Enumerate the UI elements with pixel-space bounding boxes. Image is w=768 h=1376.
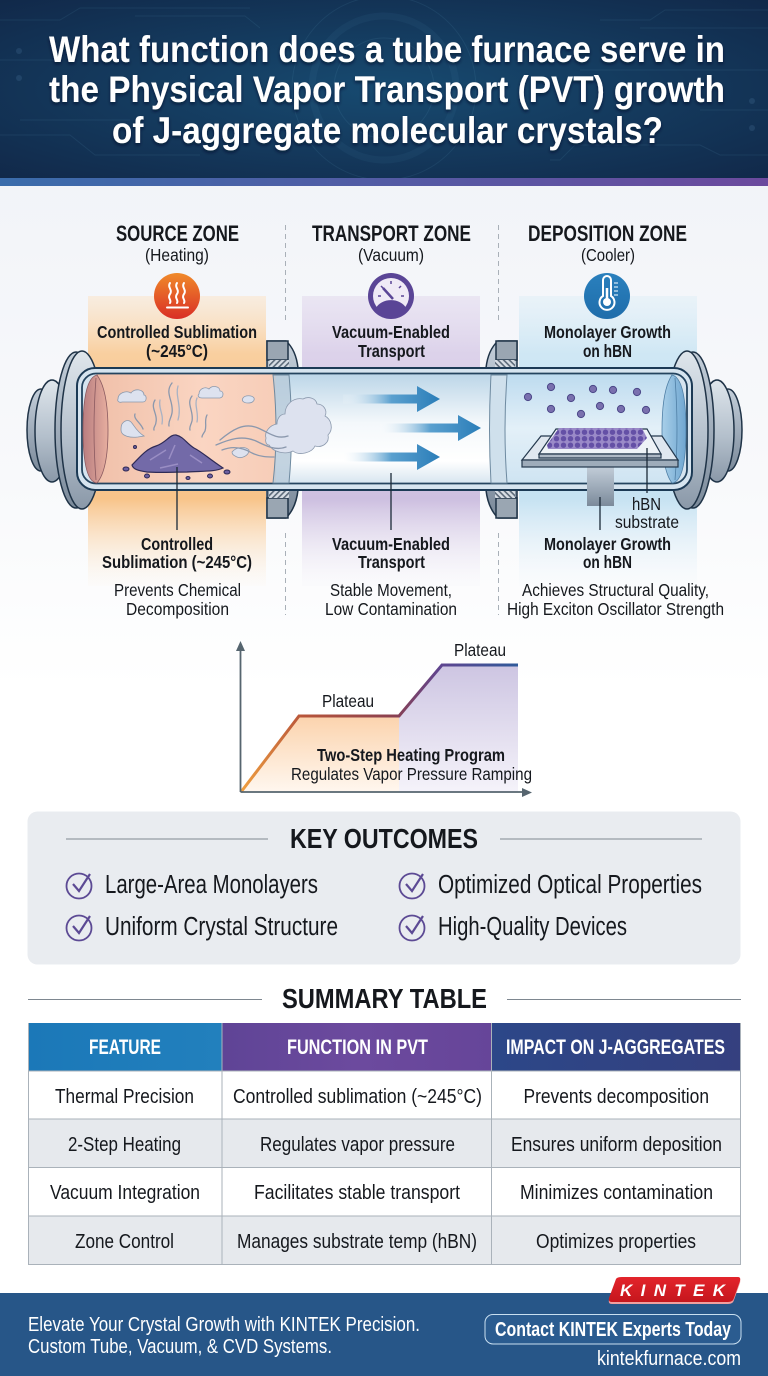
label: vacuum-enabled transport top: Transport xyxy=(358,341,425,361)
outcome: high-quality devices: High-Quality Devices xyxy=(438,913,627,941)
icon: thermometer xyxy=(584,273,630,319)
text block: source zone lower: Sublimation (~245°C) xyxy=(102,552,252,572)
chart: two-step heating program: Plateau xyxy=(454,640,506,660)
text block: transport zone lower: Transport xyxy=(358,552,425,572)
table header: FUNCTION IN PVT xyxy=(287,1036,428,1059)
icon: heat xyxy=(154,273,200,319)
transport arrows xyxy=(343,386,481,470)
table row: zone control: Optimizes properties xyxy=(536,1231,696,1253)
icon: vacuum gauge xyxy=(368,273,414,319)
text block: transport zone lower xyxy=(325,534,457,619)
header banner xyxy=(0,0,768,180)
heading: transport zone: (Vacuum) xyxy=(358,245,424,265)
outcome: large-area monolayers xyxy=(66,871,318,899)
outcome: large-area monolayers: Large-Area Monolayers xyxy=(105,871,318,899)
label: controlled sublimation top: (~245°C) xyxy=(146,341,208,361)
text block: source zone lower: Controlled xyxy=(141,534,213,554)
table row: thermal precision: Prevents decomposition xyxy=(524,1086,709,1108)
left end flange xyxy=(27,351,103,509)
leader lines xyxy=(177,448,647,530)
heading: transport zone xyxy=(312,221,471,265)
chart: two-step heating program: Two-Step Heating Program xyxy=(317,745,505,765)
label: hBN substrate: substrate xyxy=(615,512,679,532)
website: kintekfurnace.com xyxy=(597,1348,741,1370)
heading: deposition zone: DEPOSITION ZONE xyxy=(528,221,687,246)
table header xyxy=(28,1023,741,1071)
label: hBN substrate: hBN xyxy=(632,494,661,514)
outcome: uniform crystal structure: Uniform Crystal Structure xyxy=(105,913,338,941)
pedestal xyxy=(587,466,614,506)
outcome: optimized optical properties: Optimized Optical Properties xyxy=(438,871,702,899)
heading: source zone xyxy=(116,221,239,265)
panel: source zone band xyxy=(88,296,266,586)
label: hBN substrate xyxy=(615,494,679,532)
label: monolayer growth top: Monolayer Growth xyxy=(544,322,671,342)
right collar xyxy=(490,375,507,483)
text block: source zone lower: Prevents Chemical xyxy=(114,580,241,600)
powder pile xyxy=(123,435,230,480)
panel: deposition zone band xyxy=(519,296,697,586)
text block: deposition zone lower: Achieves Structural Quality, xyxy=(522,580,709,600)
table header: FEATURE xyxy=(89,1036,161,1059)
KINTEK logo xyxy=(609,1277,740,1304)
panel: key outcomes xyxy=(28,812,740,964)
table row: zone control: Zone Control xyxy=(75,1231,174,1253)
text block: deposition zone lower: High Exciton Oscillator Strength xyxy=(507,599,724,619)
table row: vacuum integration xyxy=(50,1182,713,1204)
heading: transport zone: TRANSPORT ZONE xyxy=(312,221,471,246)
KINTEK logo: KINTEK xyxy=(620,1281,727,1300)
table row: zone control: Manages substrate temp (hBN) xyxy=(237,1231,477,1253)
chart: two-step heating program: Regulates Vapor Pressure Ramping xyxy=(291,764,532,784)
table row: thermal precision: Controlled sublimation (~245°C) xyxy=(233,1086,482,1108)
deposition interior xyxy=(492,374,683,483)
wisps and clouds xyxy=(118,387,331,458)
title xyxy=(49,29,725,151)
chart: two-step heating program: Plateau xyxy=(322,691,374,711)
table row: zone control xyxy=(75,1231,696,1253)
heading: summary table: SUMMARY TABLE xyxy=(282,983,487,1014)
label: controlled sublimation top: Controlled Sublimation xyxy=(97,322,257,342)
heading: key outcomes: KEY OUTCOMES xyxy=(290,823,478,854)
text block: transport zone lower: Low Contamination xyxy=(325,599,457,619)
text block: deposition zone lower: on hBN xyxy=(583,552,632,572)
label: monolayer growth top: on hBN xyxy=(583,341,632,361)
glass tube body xyxy=(77,368,692,490)
table row: thermal precision xyxy=(55,1086,709,1108)
panel: transport zone band xyxy=(302,296,480,586)
middle flange left xyxy=(267,341,298,518)
heading: deposition zone xyxy=(528,221,687,265)
title: of J-aggregate molecular crystals? xyxy=(112,110,663,151)
furnace tube diagram xyxy=(27,341,742,530)
source interior xyxy=(90,374,278,483)
text block: source zone lower: Decomposition xyxy=(126,599,229,619)
transport interior xyxy=(276,374,492,483)
footer tagline: Elevate Your Crystal Growth with KINTEK Precision. xyxy=(28,1314,420,1336)
text block: source zone lower xyxy=(102,534,252,619)
heading: source zone: SOURCE ZONE xyxy=(116,221,239,246)
left collar xyxy=(273,375,292,483)
label: vacuum-enabled transport top xyxy=(332,322,450,361)
text block: deposition zone lower: Monolayer Growth xyxy=(544,534,671,554)
table row: vacuum integration: Vacuum Integration xyxy=(50,1182,200,1204)
table row: 2-step heating: Regulates vapor pressure xyxy=(260,1134,455,1156)
heading: deposition zone: (Cooler) xyxy=(581,245,635,265)
chart: two-step heating program xyxy=(236,640,532,797)
text block: transport zone lower: Vacuum-Enabled xyxy=(332,534,450,554)
heading: source zone: (Heating) xyxy=(145,245,209,265)
label: monolayer growth top xyxy=(544,322,671,361)
table row: 2-step heating: 2-Step Heating xyxy=(68,1134,181,1156)
middle flange right xyxy=(486,341,517,518)
footer banner xyxy=(0,1293,768,1376)
table row: 2-step heating xyxy=(68,1134,722,1156)
table row: vacuum integration: Facilitates stable transport xyxy=(254,1182,460,1204)
outcome: high-quality devices xyxy=(400,913,627,941)
substrate plate xyxy=(522,428,678,467)
header accent bar xyxy=(0,178,768,186)
label: vacuum-enabled transport top: Vacuum-Enabled xyxy=(332,322,450,342)
contact button xyxy=(485,1314,741,1344)
left tube mouth xyxy=(83,375,108,483)
vapor particles xyxy=(524,383,650,418)
table row: thermal precision: Thermal Precision xyxy=(55,1086,194,1108)
table row: vacuum integration: Minimizes contamination xyxy=(520,1182,713,1204)
summary table xyxy=(28,1023,741,1264)
table row: 2-step heating: Ensures uniform deposition xyxy=(511,1134,722,1156)
text block: deposition zone lower xyxy=(507,534,724,619)
zone dividers xyxy=(286,225,498,615)
label: controlled sublimation top xyxy=(97,322,257,361)
text block: transport zone lower: Stable Movement, xyxy=(330,580,452,600)
footer tagline: Custom Tube, Vacuum, & CVD Systems. xyxy=(28,1336,332,1358)
footer tagline xyxy=(28,1314,420,1358)
right tube mouth xyxy=(662,375,686,483)
right end flange xyxy=(666,351,742,509)
